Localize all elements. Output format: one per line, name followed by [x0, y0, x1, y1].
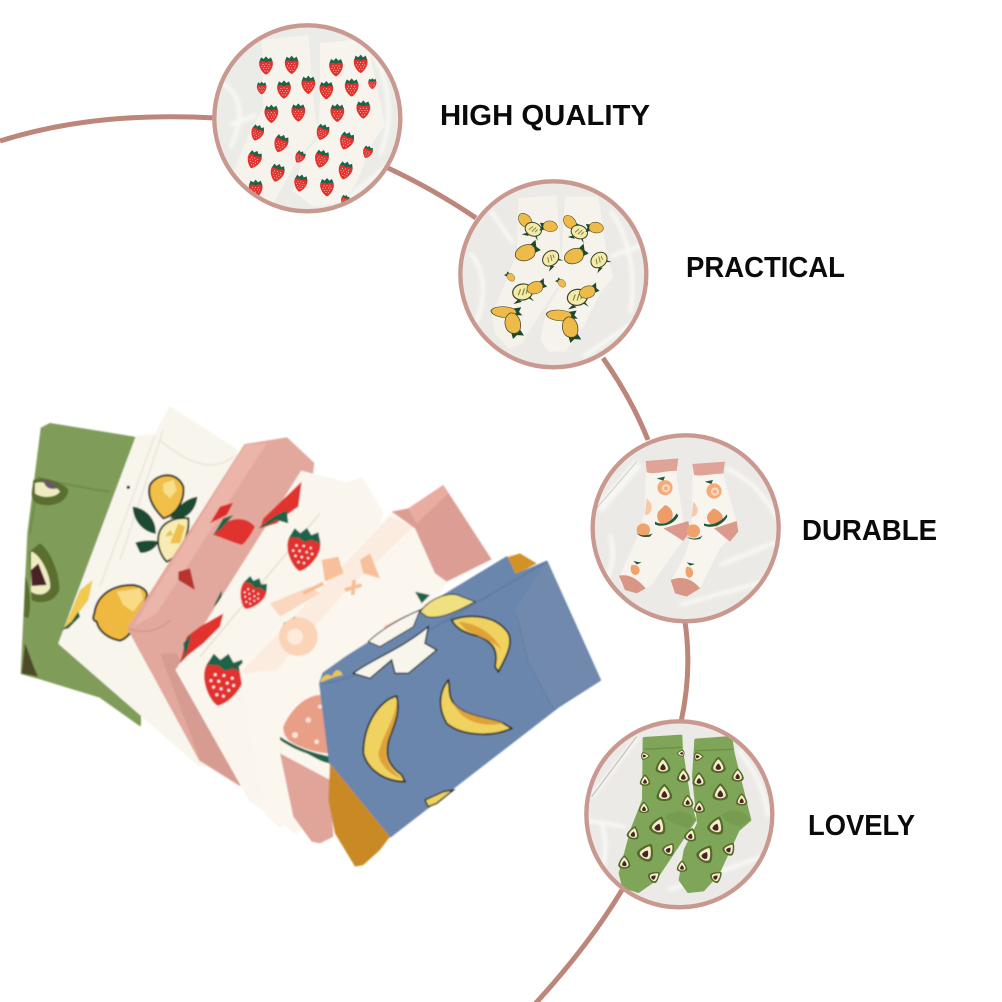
peach motif [283, 695, 330, 753]
sock: lemon white [59, 407, 237, 766]
photo: fanned fruit socks [22, 407, 600, 867]
bananas [452, 616, 510, 672]
circle: high quality socks [212, 23, 402, 213]
sock: banana blue [320, 553, 600, 867]
white banana pieces [353, 627, 437, 678]
circle: durable socks [591, 433, 781, 623]
label: high quality: HIGH QUALITY [440, 100, 650, 132]
sock: strawberry white [177, 472, 382, 833]
sock: avocado green [22, 424, 140, 725]
toe [280, 753, 333, 843]
sock: peach [240, 485, 492, 843]
circle: lovely socks [584, 719, 774, 909]
curved connecting line [0, 117, 688, 1002]
label: durable: DURABLE [802, 515, 937, 547]
label: lovely: LOVELY [808, 810, 915, 842]
label: practical: PRACTICAL [686, 252, 845, 284]
sock: strawberry pink [128, 438, 313, 785]
cuff [392, 485, 492, 582]
circle: practical socks [458, 179, 648, 369]
